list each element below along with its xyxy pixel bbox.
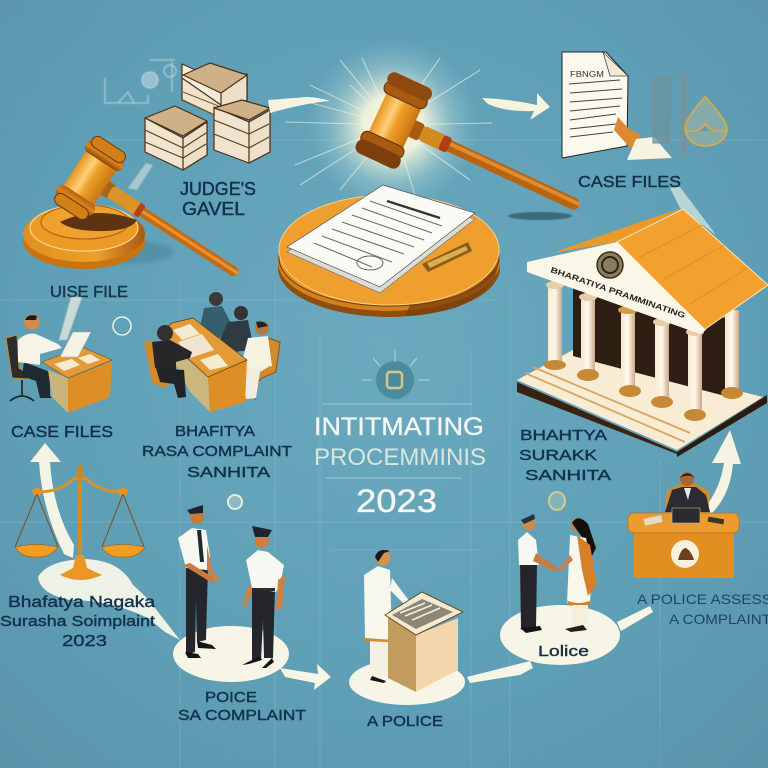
label: judge's gavel: JUDGE'S — [180, 179, 256, 199]
pad and path: scale — [38, 559, 180, 640]
back stack — [182, 63, 247, 118]
icon: clerk at lectern — [364, 550, 463, 692]
person front — [144, 325, 192, 398]
pad: handshake — [500, 605, 620, 665]
roof — [552, 208, 768, 330]
glow: sunburst behind gavel — [285, 40, 492, 210]
center title block — [314, 349, 486, 519]
icon: signed case file — [562, 52, 727, 160]
left officer — [178, 505, 220, 658]
clerk — [364, 550, 410, 683]
arrow: gavel to case file — [482, 93, 550, 120]
pad: clerk — [349, 659, 465, 705]
label: judge's gavel: GAVEL — [182, 199, 245, 219]
icon: two police officers — [178, 505, 285, 668]
chair right — [255, 338, 280, 400]
officer — [518, 514, 558, 633]
pad: police — [173, 626, 289, 682]
icon: balance scale — [15, 462, 145, 580]
arrow: case file to courthouse — [670, 187, 716, 235]
table — [160, 318, 247, 412]
label: judge's gavel — [180, 179, 256, 219]
label: police a complaint — [178, 689, 306, 724]
torso — [18, 334, 62, 365]
label: lolice: Lolice — [538, 643, 589, 660]
ring marker: handshake — [549, 492, 565, 510]
desk — [42, 347, 112, 413]
label: a police assess a complaint — [637, 591, 768, 627]
label: bhartiya complaint sanhita: RASA COMPLAINT — [142, 443, 292, 460]
paper — [562, 52, 628, 158]
scale drop — [685, 97, 727, 146]
right stack — [214, 100, 270, 163]
icon: center gavel — [353, 70, 597, 247]
hand — [614, 117, 672, 160]
arrow: up from scale to case files — [30, 443, 74, 558]
label: case files left: CASE FILES — [11, 424, 113, 441]
tools — [653, 77, 687, 155]
label: bharatiya nagarik suraksha 2023: Surasha Soimplaint — [0, 613, 156, 630]
gold bar — [422, 242, 472, 272]
icon: clerk at desk — [6, 314, 112, 413]
label: bhartiya complaint sanhita: SANHITA — [187, 464, 270, 481]
title line two: PROCEMMINIS — [314, 444, 486, 471]
icon: courthouse — [517, 208, 768, 457]
label: bharatiya suraksha sanhita: BHAHTYA — [520, 427, 607, 444]
icon: stacked books — [145, 63, 270, 170]
arrow: judge desk up to courthouse — [703, 430, 741, 513]
label: bhartiya complaint sanhita — [142, 423, 292, 481]
columns — [544, 281, 743, 421]
arrow: left gavel glow — [128, 163, 153, 190]
arrow: books to gavel — [268, 97, 330, 113]
label: case files top: CASE FILES — [578, 174, 681, 191]
path: clerk to handshake — [467, 661, 533, 683]
label: bharatiya suraksha sanhita: SANHITA — [525, 467, 611, 484]
legs — [22, 362, 52, 398]
icon: police shaking hands with woman — [518, 514, 597, 633]
label: bhartiya complaint sanhita: BHAFITYA — [175, 423, 255, 440]
label: bharatiya suraksha sanhita — [519, 427, 611, 484]
label: police a complaint: SA COMPLAINT — [178, 707, 306, 724]
woman — [558, 518, 597, 632]
arrow: police to clerk — [280, 664, 331, 690]
plinth — [517, 350, 767, 457]
chair — [6, 335, 34, 401]
emblem — [362, 349, 430, 399]
people back — [200, 292, 272, 399]
document — [287, 185, 475, 293]
icon: meeting around table — [144, 292, 280, 412]
center sound block with document — [278, 185, 500, 317]
icon: left gavel on sound block — [23, 132, 259, 307]
faint sketch icon: top left — [105, 60, 176, 103]
front stack — [145, 106, 207, 170]
lectern — [385, 592, 463, 692]
ring marker: police — [228, 495, 242, 509]
icon: ring marker — [113, 317, 131, 335]
arrow: gavel to desk — [59, 297, 82, 340]
label: police a complaint: POICE — [205, 689, 257, 706]
block — [278, 195, 500, 317]
label: use file: UISE FILE — [50, 284, 128, 301]
label: bharatiya nagarik suraksha 2023: 2023 — [62, 633, 107, 650]
sound block — [23, 205, 174, 269]
icon: magistrate at desk — [628, 472, 739, 578]
dark interior — [573, 288, 725, 396]
pediment: BHARATIYA PRAMMINATING — [549, 265, 687, 320]
path: handshake to magistrate — [617, 606, 653, 631]
pediment — [527, 242, 706, 334]
gavel — [50, 132, 259, 307]
label: bharatiya suraksha sanhita: SURAKK — [519, 447, 597, 464]
right officer — [242, 526, 285, 668]
paper: FBNGM — [570, 70, 604, 79]
year: 2023 — [356, 483, 437, 519]
label: a police: A POLICE — [367, 713, 443, 730]
label: bharatiya nagarik suraksha 2023 — [0, 594, 156, 650]
head — [24, 314, 40, 330]
judge — [665, 472, 710, 513]
title line one: INTITMATING — [314, 413, 484, 441]
label: a police assess a complaint: A POLICE ASSESS — [637, 591, 768, 607]
paper — [60, 332, 91, 357]
label: bharatiya nagarik suraksha 2023: Bhafatya Nagaka — [8, 594, 155, 611]
label: a police assess a complaint: A COMPLAINT — [669, 611, 768, 627]
desk — [628, 508, 739, 578]
